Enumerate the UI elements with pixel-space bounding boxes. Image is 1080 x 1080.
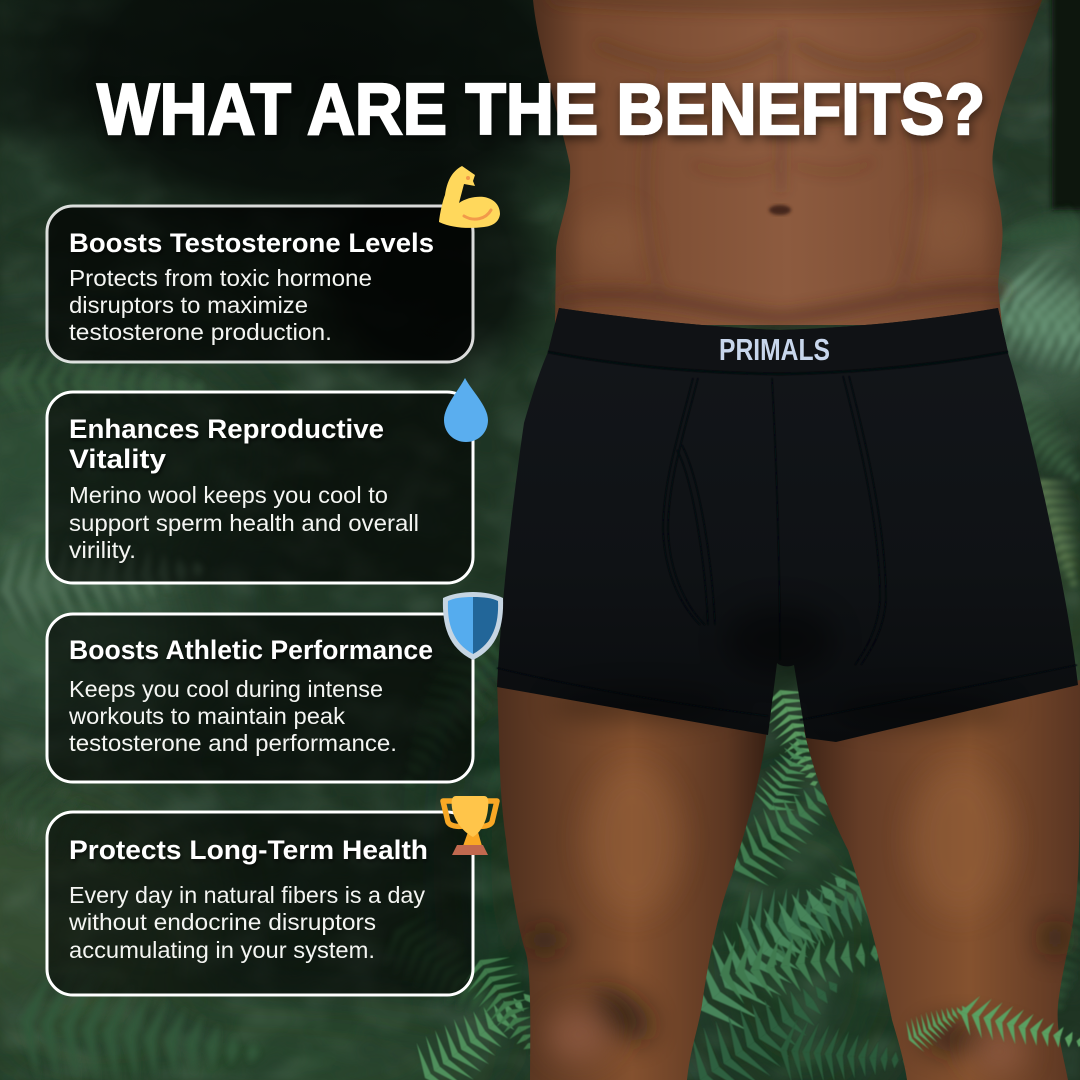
dark canopy <box>0 0 660 400</box>
boxer briefs <box>497 308 1078 742</box>
panel: boosts athletic performance <box>47 592 503 782</box>
tree trunk at top right <box>1052 0 1080 210</box>
abdominal shading <box>560 0 1030 318</box>
body text: virility. <box>69 537 136 563</box>
foreground ferns between the legs and at the left <box>405 681 913 1080</box>
body text <box>69 265 372 345</box>
left leg <box>497 680 767 1080</box>
right leg <box>804 680 1080 1080</box>
brand label: PRIMALS <box>719 332 830 367</box>
body text: without endocrine disruptors <box>68 909 376 935</box>
heading <box>69 414 384 474</box>
panel: boosts testosterone levels <box>47 166 500 362</box>
title: WHAT ARE THE BENEFITS? <box>97 70 985 150</box>
body text <box>68 676 397 756</box>
body text: Keeps you cool during intense <box>69 676 383 702</box>
torso <box>533 0 1042 325</box>
body text: Protects from toxic hormone <box>69 265 372 291</box>
icon: shield <box>443 592 503 660</box>
body text: Every day in natural fibers is a day <box>69 882 426 908</box>
heading: Protects Long-Term Health <box>69 835 428 865</box>
body text: accumulating in your system. <box>69 937 375 963</box>
body text <box>69 482 419 563</box>
panel: protects long-term health <box>47 796 497 995</box>
waistband <box>548 308 1008 374</box>
icon: water drop <box>444 378 488 442</box>
navel <box>769 205 791 215</box>
flank highlights <box>575 195 985 272</box>
body text: testosterone and performance. <box>69 730 397 756</box>
panel: enhances reproductive vitality <box>47 378 488 583</box>
photo: male torso and legs <box>497 0 1080 1080</box>
heading: Boosts Testosterone Levels <box>69 228 434 258</box>
icon: trophy <box>443 796 497 855</box>
body text: testosterone production. <box>69 319 332 345</box>
body text: Merino wool keeps you cool to <box>69 482 388 508</box>
foreground fern over right knee <box>900 992 1080 1066</box>
heading: Vitality <box>69 444 166 474</box>
body text: disruptors to maximize <box>69 292 308 318</box>
seams <box>497 352 1077 720</box>
body text: support sperm health and overall <box>69 510 419 536</box>
icon: flexed biceps <box>439 166 500 228</box>
heading: Boosts Athletic Performance <box>69 635 433 665</box>
leg muscle shading <box>525 765 1067 1072</box>
body text <box>68 882 426 963</box>
body text: workouts to maintain peak <box>68 703 346 729</box>
heading: Enhances Reproductive <box>69 414 384 444</box>
fabric shading <box>550 605 1010 724</box>
